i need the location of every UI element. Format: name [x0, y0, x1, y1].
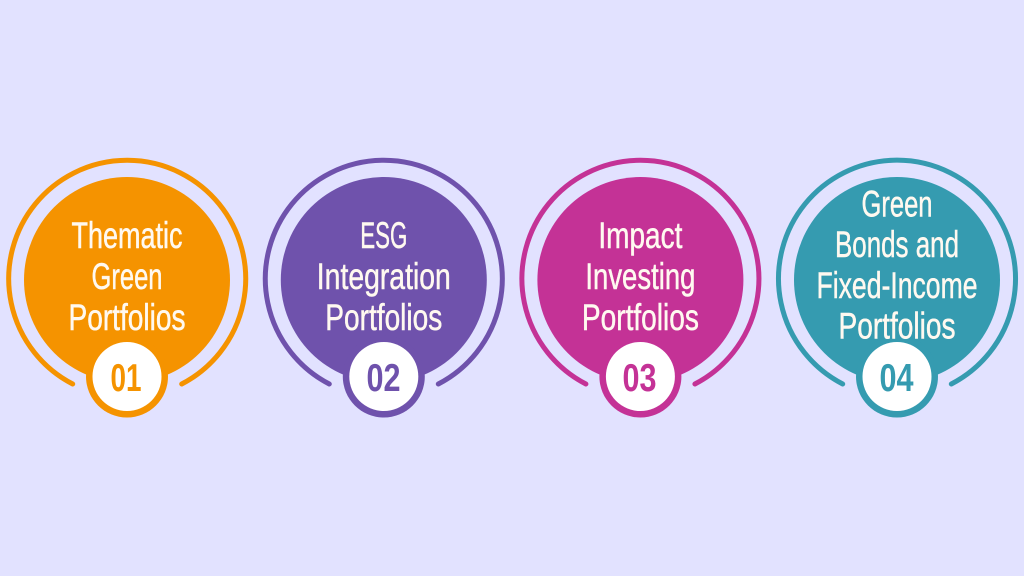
- heading 03: Portfolios: [582, 297, 699, 338]
- number badge 02: 02: [366, 357, 400, 400]
- arc ring 04: [778, 160, 1015, 384]
- number badge 01: [86, 336, 168, 418]
- panel: 03 Impact Investing Portfolios: [522, 160, 759, 418]
- panel: 02 ESG Integration Portfolios: [265, 160, 502, 418]
- panel: 01 Thematic Green Portfolios: [9, 160, 246, 418]
- arc ring 01: [9, 160, 246, 384]
- arc ring 03: [522, 160, 759, 384]
- filled circle 02: [281, 177, 487, 383]
- number badge 04: 04: [880, 357, 914, 400]
- heading 02: [317, 215, 451, 338]
- filled circle 01: [24, 177, 230, 383]
- heading 03: Impact: [598, 215, 683, 256]
- heading 01: [68, 215, 186, 338]
- heading 01: Thematic: [72, 215, 182, 256]
- number badge 03: [599, 336, 681, 418]
- number badge 03: 03: [622, 357, 656, 400]
- heading 04: [816, 184, 978, 346]
- heading 01: Portfolios: [68, 297, 186, 338]
- heading 03: Investing: [585, 256, 695, 297]
- arc ring 02: [265, 160, 502, 384]
- heading 01: Green: [92, 256, 162, 297]
- number badge 01: 01: [110, 357, 142, 400]
- heading 02: Portfolios: [325, 297, 442, 338]
- heading 02: ESG: [360, 215, 407, 256]
- heading 04: Portfolios: [838, 306, 956, 346]
- heading 03: [582, 215, 699, 338]
- filled circle 04: [794, 177, 1000, 383]
- number badge 04: [856, 336, 938, 418]
- filled circle 03: [537, 177, 743, 383]
- heading 02: Integration: [317, 256, 451, 297]
- panel: 04 Green Bonds and Fixed-Income Portfolios: [778, 160, 1015, 418]
- number badge 02: [343, 336, 425, 418]
- heading 04: Green: [862, 184, 932, 224]
- heading 04: Bonds and: [835, 224, 959, 265]
